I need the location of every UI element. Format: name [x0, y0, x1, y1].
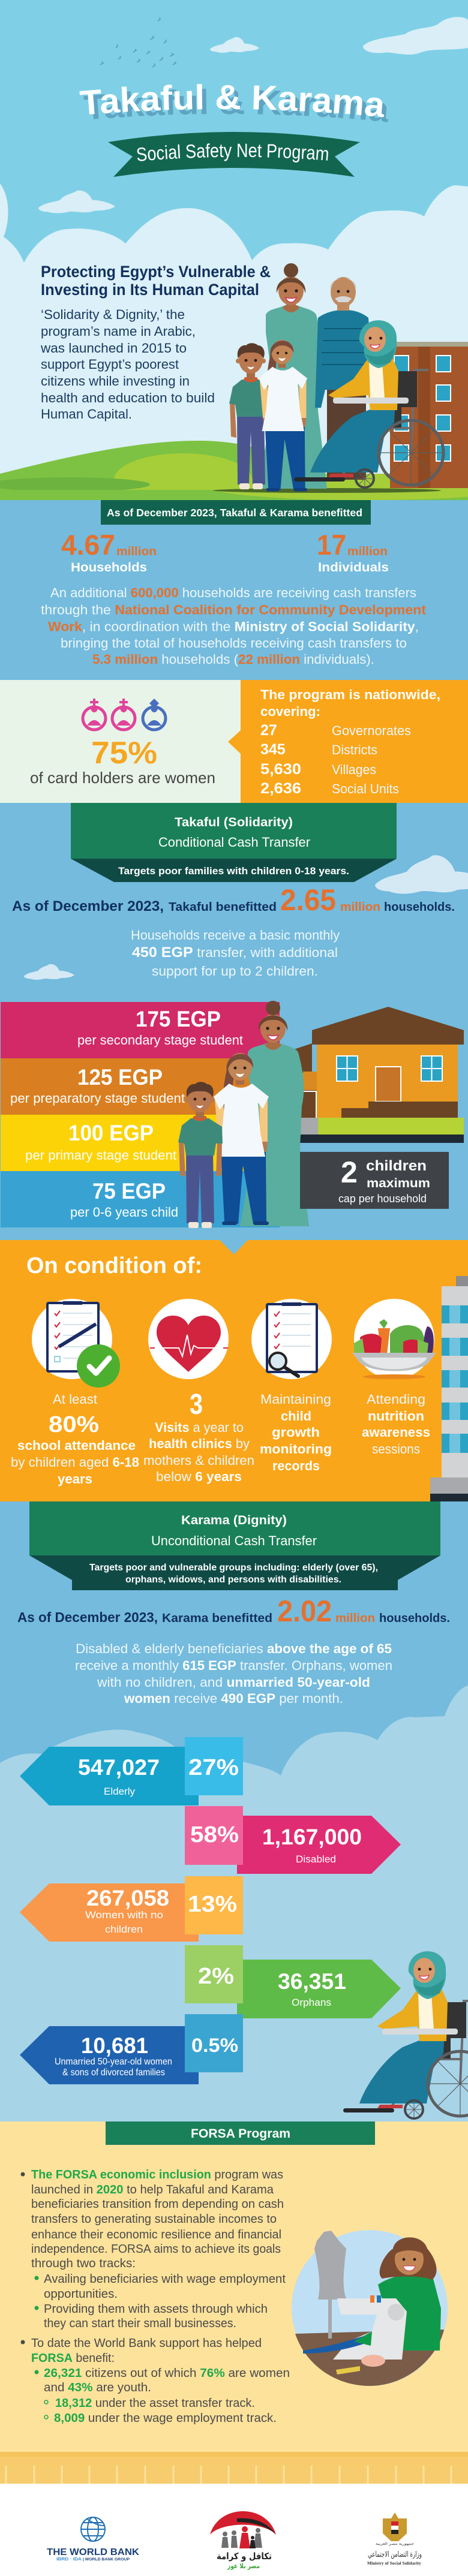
title: Takaful & Karama — [84, 89, 388, 122]
panel: nationwide coverage: 5,630 — [260, 761, 301, 778]
cloud: top middle — [210, 37, 259, 53]
logo: Takaful and Karama: تكافل و كرامة — [217, 2551, 272, 2562]
text: basic monthly transfer: Households receive a basic monthly — [131, 928, 340, 943]
callout: 2 children cap: maximum — [367, 1176, 430, 1190]
condition: health clinic visits: mothers & children — [143, 1453, 254, 1468]
icon: birds — [100, 17, 176, 67]
arrow: unmarried women and sons: 0.5% — [191, 2035, 238, 2056]
stat line: Takaful benefitted: As of December 2023, — [12, 898, 164, 914]
condition: growth monitoring — [251, 1299, 332, 1473]
text: FORSA details list: 18,312 under the asset transfer track. — [55, 2397, 255, 2410]
text: additional households paragraph: 5.3 million households (22 million individuals). — [92, 652, 374, 667]
bar: 100 EGP: per primary stage student — [25, 1148, 177, 1163]
footer background — [0, 2484, 468, 2576]
text: FORSA details list: and 43% are youth. — [44, 2381, 151, 2394]
banner: Karama: Targets poor and vulnerable groups including: elderly (over 65), — [89, 1563, 378, 1573]
banner: Karama: Unconditional Cash Transfer — [151, 1533, 317, 1548]
icon: clipboard with check — [47, 1301, 120, 1388]
callout: 2 children cap: cap per household — [338, 1193, 427, 1205]
chart: Karama beneficiary arrows — [20, 1737, 401, 2084]
condition: health clinic visits: 3 — [190, 1389, 203, 1421]
arrow: orphans — [185, 1945, 401, 2018]
arrow: women with no children: children — [105, 1924, 143, 1935]
arrow: elderly: 547,027 — [78, 1755, 160, 1780]
text: additional households paragraph: Work, in coordination with the Ministry of Social Solidarity , — [48, 619, 419, 634]
arrow: orphans: 36,351 — [278, 1969, 346, 1994]
text: FORSA details list: Availing beneficiaries with wage employment — [44, 2273, 286, 2286]
stat line: Karama benefitted: As of December 2023, — [17, 1609, 158, 1625]
bar: 100 EGP: 100 EGP — [68, 1121, 154, 1145]
stat line: Takaful benefitted: households. — [384, 901, 455, 914]
arrow: orphans: Orphans — [292, 1997, 331, 2008]
building: right tower — [430, 1276, 468, 1501]
cloud: left — [38, 191, 115, 213]
banner: Takaful — [71, 803, 397, 882]
bar: 75 EGP: 75 EGP — [92, 1179, 166, 1203]
stat: households: Households — [71, 560, 147, 574]
stat: individuals — [317, 529, 389, 574]
condition: nutrition awareness: Attending — [367, 1392, 425, 1407]
banner: as of December: As of December 2023, Takaful & Karama benefitted — [107, 507, 362, 519]
condition: health clinic visits: Visits a year to — [155, 1420, 244, 1435]
condition: school attendance: by children aged 6-18 — [11, 1455, 139, 1470]
arrow: elderly: 27% — [188, 1755, 239, 1780]
text: FORSA details list: 26,321 citizens out of which 76% are women — [44, 2367, 290, 2380]
stat line: Karama benefitted — [17, 1594, 450, 1628]
stat line: Takaful benefitted — [12, 883, 455, 917]
text: FORSA details list: launched in 2020 to help Takaful and Karama — [31, 2183, 274, 2196]
heading: on condition of: On condition of: — [26, 1253, 202, 1278]
text: intro body — [40, 307, 215, 422]
text: FORSA details list — [20, 2168, 290, 2425]
stat: households: million — [116, 544, 157, 558]
text: additional households paragraph: through the National Coalition for Community Development — [41, 602, 427, 618]
background: light cloud mass — [0, 183, 468, 500]
panel: conditions — [0, 1240, 468, 1501]
logo: Takaful and Karama — [210, 2511, 276, 2570]
logo: The World Bank: IBRD · IDA — [56, 2557, 82, 2562]
arrow: women with no children: 13% — [188, 1892, 237, 1917]
background: blue section — [0, 500, 468, 2122]
bar: 125 EGP — [1, 1058, 280, 1115]
arrow: unmarried women and sons: & sons of divorced families — [62, 2068, 165, 2078]
stat line: Takaful benefitted: 2.65 — [280, 883, 336, 917]
panel: women card holders: of card holders are women — [30, 769, 215, 787]
logo: Ministry of Social Solidarity: Ministry of Social Solidarity — [367, 2560, 421, 2566]
stat line: Karama benefitted: Karama benefitted — [162, 1612, 272, 1625]
text: additional households paragraph — [41, 585, 427, 667]
banner: FORSA program — [106, 2121, 375, 2145]
arrow: elderly: Elderly — [104, 1786, 135, 1797]
banner: Takaful: Conditional Cash Transfer — [158, 835, 310, 850]
cloud: left — [24, 964, 74, 980]
logo: Ministry of Social Solidarity — [367, 2512, 422, 2566]
condition: nutrition awareness: nutrition — [368, 1409, 424, 1424]
text: basic monthly transfer: 450 EGP transfer, with additional — [132, 944, 338, 961]
condition: health clinic visits — [143, 1299, 254, 1484]
condition: school attendance: 80% — [49, 1412, 99, 1437]
background: hero sky — [0, 0, 468, 500]
icon: clipboard with magnifier — [267, 1302, 317, 1376]
banner: Karama: orphans, widows, and persons with disabilities. — [125, 1575, 341, 1585]
text: basic monthly transfer — [131, 928, 340, 979]
condition: nutrition awareness: awareness — [362, 1425, 430, 1440]
bar: 100 EGP — [1, 1115, 280, 1171]
condition: health clinic visits: health clinics by — [149, 1436, 250, 1451]
banner: Karama: Karama (Dignity) — [181, 1513, 287, 1527]
arrow: orphans: 2% — [198, 1964, 234, 1989]
panel: FORSA background — [0, 2121, 468, 2452]
cloud: top right — [363, 17, 468, 55]
text: intro body: Human Capital. — [41, 407, 132, 422]
text: intro body: support Egypt’s poorest — [41, 357, 179, 372]
illustration: woman in wheelchair — [343, 1951, 468, 2118]
callout: 2 children cap — [300, 1152, 449, 1209]
banner: Karama — [29, 1501, 440, 1590]
panel: nationwide coverage: Governorates — [332, 723, 411, 738]
arrow: women with no children: 267,058 — [86, 1886, 169, 1910]
condition: growth monitoring: Maintaining — [260, 1392, 331, 1407]
ribbon: subtitle — [108, 132, 360, 177]
stat: individuals: 17 — [317, 529, 346, 561]
arrow: unmarried women and sons — [20, 2014, 243, 2084]
condition: growth monitoring: child — [281, 1409, 311, 1424]
panel: nationwide coverage — [228, 680, 468, 803]
heading: intro — [41, 263, 271, 299]
text: Karama transfer amounts: Disabled & elderly beneficiaries above the age of 65 — [76, 1641, 392, 1656]
logo: Ministry of Social Solidarity: جمهورية مصر العربية — [376, 2542, 414, 2546]
icon: heart with ECG — [150, 1316, 228, 1372]
cloud: right of Takaful banner — [375, 855, 468, 894]
arrow: unmarried women and sons: 10,681 — [81, 2033, 148, 2058]
icon: globe — [81, 2517, 105, 2541]
stat line: Karama benefitted: 2.02 — [277, 1594, 332, 1628]
text: intro body: ‘Solidarity & Dignity,’ the — [41, 307, 185, 322]
logo: The World Bank — [47, 2517, 139, 2562]
text: FORSA details list: Providing them with assets through which — [44, 2303, 268, 2316]
condition: school attendance: At least — [53, 1392, 97, 1407]
decorative band: brick wall — [0, 2452, 468, 2484]
stat: households — [61, 529, 157, 574]
stat line: Takaful benefitted: million — [340, 900, 380, 914]
text: additional households paragraph: An additional 600,000 households are receiving cash transfers — [50, 585, 416, 600]
text: Karama transfer amounts: receive a monthly 615 EGP transfer. Orphans, women — [75, 1658, 392, 1673]
illustration: house — [294, 1007, 464, 1143]
condition: health clinic visits: below 6 years — [156, 1469, 242, 1484]
bar: 75 EGP: per 0-6 years child — [70, 1205, 178, 1220]
panel: nationwide coverage: 27 — [260, 722, 277, 739]
text: Karama transfer amounts: women receive 490 EGP per month. — [124, 1691, 343, 1706]
text: FORSA details list: they can start their small businesses. — [44, 2317, 236, 2330]
banner: Takaful: Targets poor families with children 0-18 years. — [118, 865, 349, 877]
condition: growth monitoring: growth — [272, 1425, 320, 1440]
callout: 2 children cap: 2 — [341, 1155, 358, 1189]
title: Takaful & Karama — [79, 84, 384, 118]
text: intro body: health and education to build — [41, 390, 215, 405]
bullets — [20, 2172, 48, 2419]
logo: Takaful and Karama: مصر بلا عوز — [227, 2562, 260, 2570]
panel: nationwide coverage: Districts — [332, 742, 377, 757]
building: hero brick — [390, 342, 468, 488]
panel: nationwide coverage: covering: — [260, 704, 320, 719]
text: basic monthly transfer: support for up to 2 children. — [152, 964, 318, 979]
panel: nationwide coverage: Villages — [332, 762, 376, 777]
text: additional households paragraph: bringing the total of households receiving cash transfers to — [61, 636, 407, 651]
panel: women card holders: 75% — [91, 736, 157, 771]
condition: growth monitoring: monitoring — [260, 1442, 332, 1456]
condition: nutrition awareness — [352, 1299, 436, 1456]
arrow: disabled — [185, 1806, 401, 1874]
heading: intro: Protecting Egypt’s Vulnerable & — [41, 263, 271, 281]
heading: intro: Investing in Its Human Capital — [41, 281, 259, 299]
bar: 125 EGP: per preparatory stage student — [10, 1091, 185, 1106]
illustration: woman sewing — [292, 2230, 448, 2386]
panel: nationwide coverage: The program is nationwide, — [260, 687, 440, 702]
text: Karama transfer amounts — [75, 1641, 392, 1706]
illustration: family in hero — [229, 263, 443, 491]
banner: Takaful: Takaful (Solidarity) — [175, 815, 293, 829]
ribbon: subtitle: Social Safety Net Program — [137, 143, 328, 162]
text: intro body: program’s name in Arabic, — [41, 324, 196, 339]
text: FORSA details list: independence. FORSA aims to achieve its goals — [31, 2243, 281, 2256]
icon: gender symbols — [83, 699, 166, 730]
callout: 2 children cap: children — [366, 1158, 427, 1174]
text: FORSA details list: FORSA benefit: — [31, 2352, 115, 2365]
text: Karama transfer amounts: with no children, and unmarried 50-year-old — [97, 1675, 370, 1690]
icon: eagle — [383, 2512, 407, 2541]
bar: 125 EGP: 125 EGP — [77, 1065, 163, 1090]
text: intro body: citizens while investing in — [41, 374, 190, 389]
bar: 75 EGP — [1, 1171, 280, 1227]
condition: school attendance: school attendance — [17, 1438, 136, 1453]
condition: nutrition awareness: sessions — [372, 1442, 420, 1456]
condition: growth monitoring: records — [272, 1458, 320, 1473]
text: FORSA details list: through two tracks: — [31, 2257, 136, 2270]
arrow: disabled: 1,167,000 — [262, 1825, 362, 1849]
bar: 175 EGP: per secondary stage student — [77, 1033, 244, 1048]
ground: hills — [0, 441, 468, 506]
logo: The World Bank: | WORLD BANK GROUP — [83, 2557, 130, 2562]
text: FORSA details list: transfers to generating sustainable incomes to — [31, 2213, 277, 2226]
text: FORSA details list: The FORSA economic inclusion program was — [31, 2168, 283, 2181]
panel: nationwide coverage: 2,636 — [260, 780, 301, 797]
arrow: elderly — [20, 1737, 243, 1805]
stat line: Takaful benefitted: Takaful benefitted — [169, 901, 277, 914]
stat: individuals: Individuals — [318, 560, 389, 574]
banner: FORSA program: FORSA Program — [191, 2127, 290, 2141]
bar: 175 EGP: 175 EGP — [136, 1007, 221, 1031]
arrow: women with no children — [20, 1876, 243, 1942]
logo: The World Bank: THE WORLD BANK — [47, 2547, 139, 2557]
icon: vegetable bowl — [352, 1319, 436, 1379]
stat line: Karama benefitted: households. — [379, 1612, 450, 1625]
text: FORSA details list: 8,009 under the wage employment track. — [54, 2412, 277, 2425]
panel: nationwide coverage: Social Units — [332, 781, 399, 796]
stat line: Karama benefitted: million — [335, 1611, 375, 1625]
stat: individuals: million — [347, 544, 388, 558]
condition: school attendance: years — [58, 1471, 92, 1486]
panel: women card holders — [0, 680, 241, 803]
arrow: disabled: Disabled — [296, 1853, 336, 1865]
chart: EGP amounts stacked bars — [1, 1002, 280, 1227]
panel: nationwide coverage: 345 — [260, 741, 286, 758]
text: intro body: was launched in 2015 to — [40, 341, 187, 356]
banner: as of December — [101, 500, 371, 525]
arrow: disabled: 58% — [190, 1822, 239, 1847]
bar: 175 EGP — [1, 1002, 280, 1058]
stat: households: 4.67 — [61, 529, 115, 561]
text: FORSA details list: opportunities. — [44, 2288, 118, 2301]
background: lower cloud — [0, 1686, 468, 2122]
condition: school attendance — [11, 1299, 139, 1486]
text: FORSA details list: To date the World Bank support has helped — [31, 2337, 262, 2350]
arrow: unmarried women and sons: Unmarried 50-year-old women — [55, 2057, 172, 2067]
arrow: women with no children: Women with no — [85, 1909, 163, 1921]
text: FORSA details list: beneficiaries transition from depending on cash — [31, 2198, 284, 2211]
illustration: mother and children — [178, 1001, 309, 1228]
logo: Ministry of Social Solidarity: وزارة التضامن الاجتماعي — [368, 2550, 422, 2559]
text: FORSA details list: enhance their economic resilience and financial — [31, 2228, 281, 2241]
